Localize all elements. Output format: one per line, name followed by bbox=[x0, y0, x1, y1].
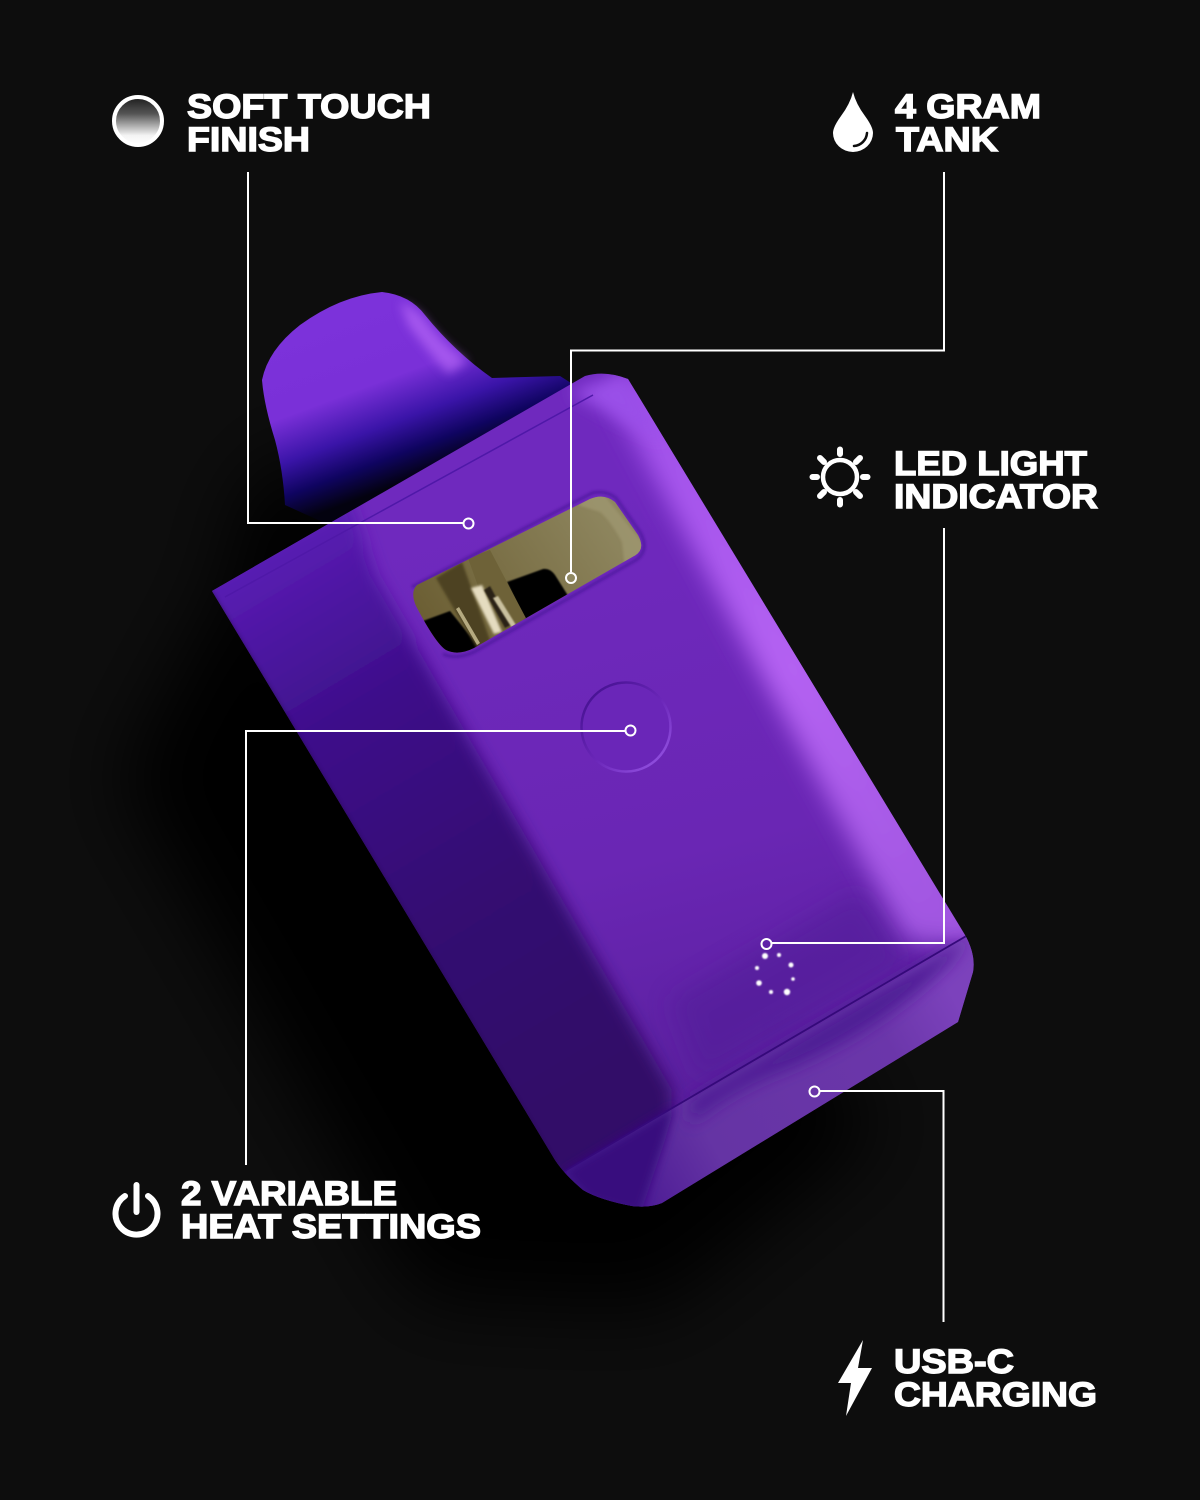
device window bbox=[412, 490, 646, 658]
label: USB-C charging: USB-C bbox=[894, 1343, 1014, 1381]
label: LED light indicator: LED LIGHT bbox=[894, 445, 1087, 483]
connector: soft touch bbox=[248, 172, 474, 528]
label: heat settings bbox=[181, 1175, 481, 1246]
label: 4 gram tank: TANK bbox=[896, 121, 998, 159]
label: LED light indicator bbox=[894, 445, 1098, 516]
connector: heat settings bbox=[246, 726, 636, 1165]
connector: LED bbox=[762, 528, 944, 949]
icon: soft touch sphere bbox=[114, 97, 162, 145]
left dark band bbox=[170, 500, 672, 1220]
label: soft touch finish: SOFT TOUCH bbox=[187, 88, 431, 126]
connector: tank bbox=[566, 172, 944, 583]
icon: power bbox=[116, 1185, 158, 1235]
icon: water drop bbox=[833, 92, 873, 152]
connector: USB-C bbox=[810, 1086, 944, 1322]
label: USB-C charging bbox=[894, 1343, 1097, 1414]
label: 4 gram tank: 4 GRAM bbox=[895, 88, 1041, 126]
device illustration bbox=[212, 292, 974, 1207]
device LED dots bbox=[755, 953, 795, 995]
label: 4 gram tank bbox=[895, 88, 1041, 159]
left edge fade bbox=[205, 590, 550, 1165]
device body bbox=[212, 374, 974, 1207]
icon: sun bbox=[812, 450, 868, 504]
label: heat settings: 2 VARIABLE bbox=[181, 1175, 397, 1213]
device button bbox=[582, 682, 670, 772]
label: soft touch finish: FINISH bbox=[187, 121, 310, 159]
label: USB-C charging: CHARGING bbox=[894, 1376, 1097, 1414]
label: soft touch finish bbox=[187, 88, 431, 159]
device shadow bbox=[120, 440, 880, 1310]
right highlight band bbox=[612, 360, 1000, 950]
base section bbox=[563, 935, 985, 1215]
label: LED light indicator: INDICATOR bbox=[894, 478, 1098, 516]
seam lines bbox=[563, 935, 968, 1172]
label: heat settings: HEAT SETTINGS bbox=[181, 1208, 481, 1246]
icon: lightning bolt bbox=[838, 1340, 872, 1416]
lower face shade bbox=[691, 904, 886, 1032]
device mouthpiece bbox=[262, 292, 590, 530]
